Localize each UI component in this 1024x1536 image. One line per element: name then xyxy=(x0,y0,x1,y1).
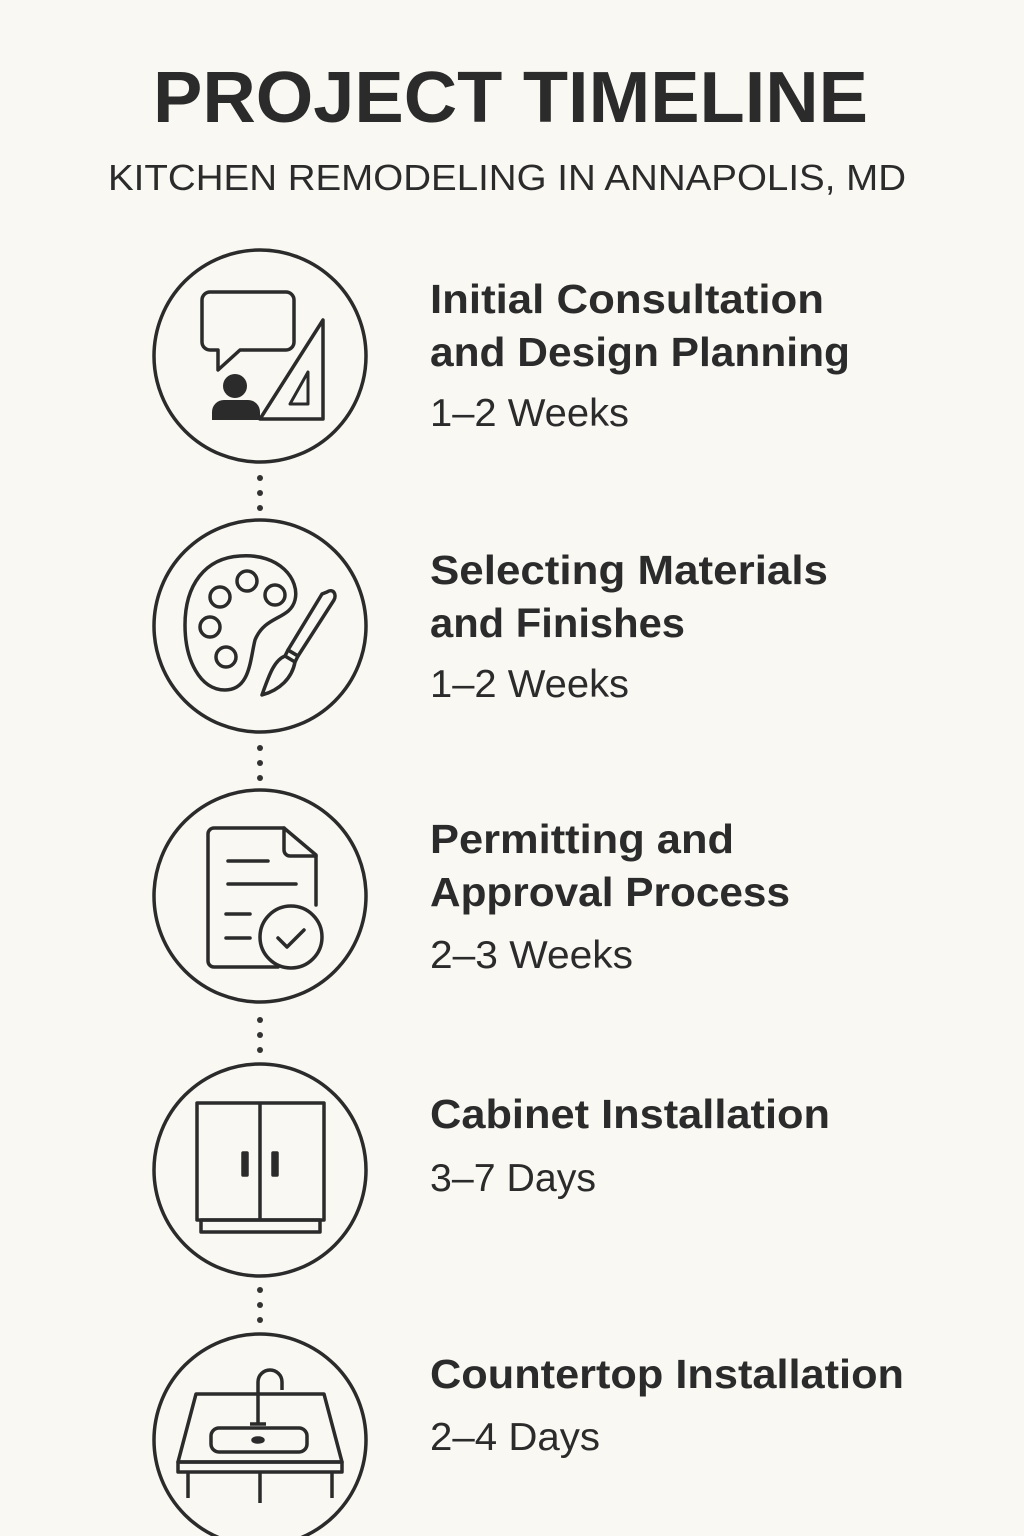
subtitle: KITCHEN REMODELING IN ANNAPOLIS, MD xyxy=(108,157,906,198)
step 2 text: 1–2 Weeks xyxy=(430,663,629,706)
step 4 text: 3–7 Days xyxy=(430,1157,596,1200)
step 2 icon: palette xyxy=(154,520,366,732)
step 5 icon: countertop sink xyxy=(154,1334,366,1536)
step 2 text xyxy=(430,547,828,706)
title: PROJECT TIMELINE xyxy=(153,58,868,138)
step 4 text xyxy=(430,1091,830,1200)
step 4 icon: cabinet xyxy=(154,1064,366,1276)
step 3 text: Approval Process xyxy=(430,869,790,915)
step 4 text: Cabinet Installation xyxy=(430,1091,830,1137)
step 1 text: Initial Consultation xyxy=(430,276,824,322)
step 1 icon: consultation xyxy=(154,250,366,462)
step 3 text: Permitting and xyxy=(430,816,734,862)
step 1 text xyxy=(430,276,850,435)
step 1 text: and Design Planning xyxy=(430,329,850,375)
step 1 text: 1–2 Weeks xyxy=(430,392,629,435)
step 2 text: Selecting Materials xyxy=(430,547,828,593)
connector dots xyxy=(257,475,263,1323)
step 5 text: Countertop Installation xyxy=(430,1351,904,1397)
step 5 text: 2–4 Days xyxy=(430,1416,600,1459)
step 5 text xyxy=(430,1351,904,1459)
step 3 text xyxy=(430,816,790,977)
step 2 text: and Finishes xyxy=(430,600,685,646)
step 3 text: 2–3 Weeks xyxy=(430,934,633,977)
step 3 icon: permit document xyxy=(154,790,366,1002)
